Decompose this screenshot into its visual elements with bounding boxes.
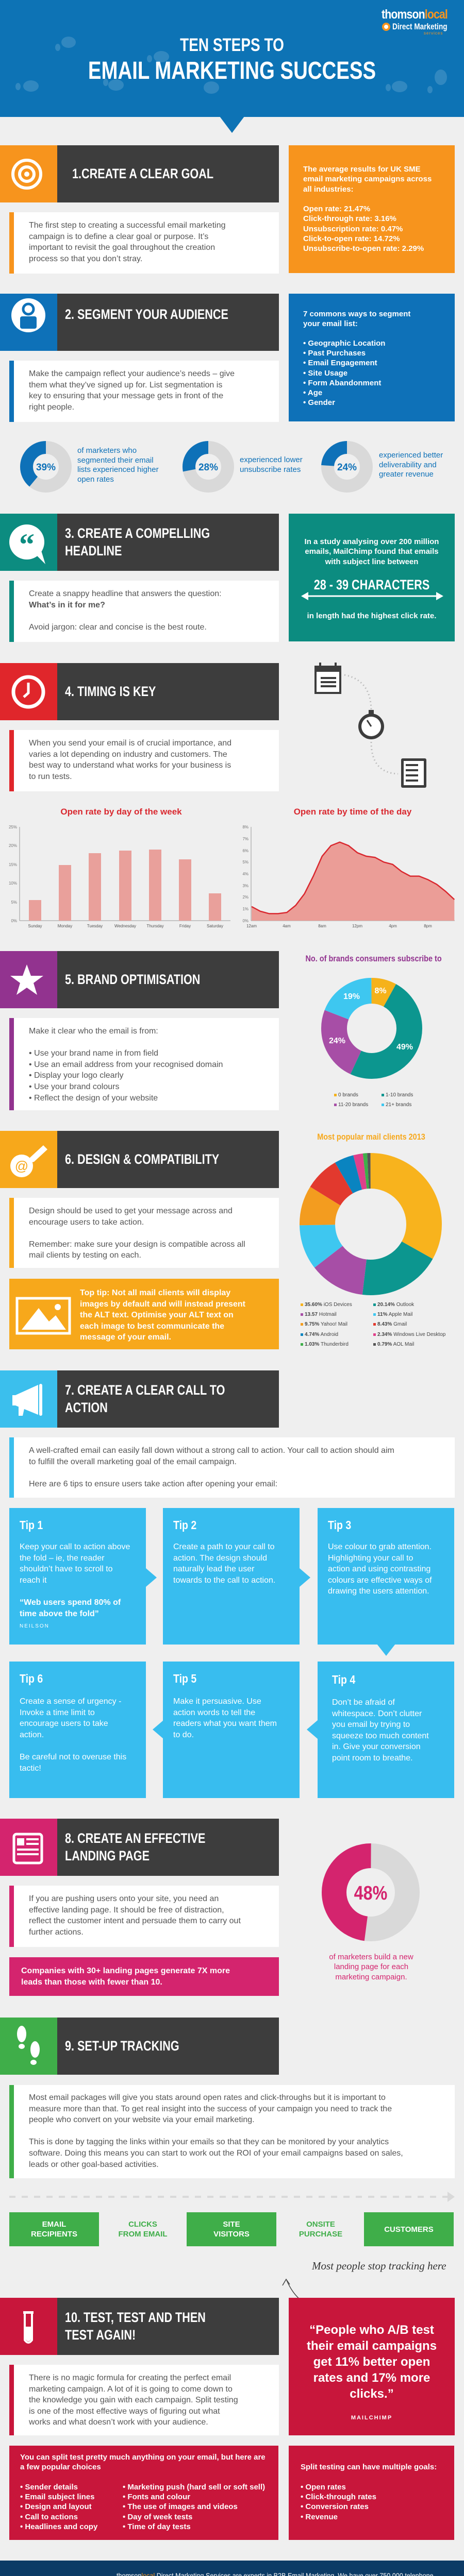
area chart: 7% [242,837,248,841]
section 3 text [9,581,279,642]
brands donut chart: No. of brands consumers subscribe to [305,954,442,963]
48% donut stat: 48% [354,1883,387,1904]
icon: test tube [0,2298,57,2355]
area chart: 6% [242,849,248,853]
area chart: 4% [242,872,248,876]
section 2 donut stats [20,441,443,493]
brands donut chart: 24% [329,1037,345,1045]
section 7 header [0,1370,279,1428]
section 8 header: 8. CREATE AN EFFECTIVE [65,1831,205,1846]
section 8 callout: Companies with 30+ landing pages generate 7X more [21,1967,230,1975]
area chart: 8am [318,924,326,928]
area chart: 4pm [389,924,397,928]
title: TEN STEPS TO [180,35,284,55]
section 1 stats box: Unsubscribe-to-open rate: 2.29% [303,244,424,253]
split test goals box: • Click-through rates [301,2493,376,2501]
section 3 stat box: with subject line between [325,557,418,566]
tip 1: Keep your call to action above [20,1543,130,1551]
tracking funnel boxes: FROM EMAIL [119,2230,167,2239]
section 2 donut stats: segmented their email [77,455,154,465]
split test goals box: Split testing can have multiple goals: [301,2463,437,2471]
top tip box: images by default and will instead present [80,1300,245,1309]
bar chart: 15% [9,862,17,867]
mail clients donut chart: 9.75% Yahoo! Mail [305,1321,347,1327]
section 3 text: What’s in it for me? [29,601,105,609]
section 1 stats box: Unsubscription rate: 0.47% [303,225,403,233]
bar chart: 20% [9,843,17,848]
brands donut chart: 21+ brands [386,1102,411,1108]
bar chart: Thursday [146,924,164,928]
tip 2 [163,1508,300,1645]
top tip box: each image to best communicate the [80,1322,224,1331]
arrow: tip4 to tip5 [307,1720,318,1739]
icon: target [0,145,57,202]
tip 4: you email by trying to [332,1720,410,1729]
section 8 header: LANDING PAGE [65,1848,150,1863]
bar chart: Tuesday [87,924,103,928]
section 9 text [9,2085,455,2178]
split test choices box: • The use of images and videos [123,2502,238,2511]
top tip box [9,1279,279,1349]
mail clients donut chart: Most popular mail clients 2013 [317,1132,425,1142]
tip 6: encourage users to take [20,1719,108,1728]
section 4 text: to run tests. [29,772,72,781]
section 1 text: campaign is to define a clear goal or purpose. It’s [29,232,208,241]
section 10 header: 10. TEST, TEST AND THEN [65,2310,206,2325]
logo: thomson local: services [424,31,443,36]
tip 6: Invoke a time limit to [20,1708,95,1717]
area chart: 12am [246,924,257,928]
section 9 text: measure more than that. To get real insight into the success of your campaign you need to track the [29,2105,392,2113]
tip 2: Create a path to your call to [173,1543,275,1551]
section 1 stats box: Click-through rate: 3.16% [303,214,396,223]
split test choices box: • Call to actions [20,2513,78,2521]
tip 4: Don’t be afraid of [332,1698,395,1707]
tracking funnel boxes [9,2212,454,2246]
section 2 list box: your email list: [303,319,358,328]
section 1 header [0,145,279,202]
section 2 donut stats: unsubscribe rates [240,465,301,474]
tip 5: to do. [173,1731,194,1739]
mail clients donut chart: 0.79% AOL Mail [377,1342,414,1347]
quote box: mailchimp [289,2298,455,2435]
split test goals box: • Open rates [301,2483,346,2492]
bar chart: Open rate by day of the week [60,807,182,817]
area chart [242,807,455,928]
section 3 stat box: emails, MailChimp found that emails [305,547,439,556]
tip 5: Tip 5 [173,1672,196,1685]
section 4 text: When you send your email is of crucial importance, and [29,739,231,748]
tip 4: point room to breathe. [332,1754,413,1762]
section 2 donut stats: deliverability and [379,461,437,469]
tip 5 [163,1662,300,1798]
tip 1 [9,1508,146,1645]
tip 4: whitespace. Don’t clutter [332,1709,422,1718]
bar chart: Sunday [28,924,42,928]
icon: at sign with pencil: @ [15,1158,28,1174]
section 1 header: 1.CREATE A CLEAR GOAL [72,166,213,181]
tip 5: action words to tell the [173,1708,255,1717]
section 2 text: Make the campaign reflect your audience’s needs – give [29,369,235,378]
section 6 text: Remember: make sure your design is compatible across all [29,1240,245,1249]
tip 1: NEILSON [20,1623,49,1629]
arrow: tip2 to tip3 [300,1568,310,1587]
section 2 list box: • Site Usage [303,369,347,378]
quote box: mailchimp: MAILCHIMP [351,2415,392,2421]
section 1 text: process so that you don’t stray. [29,255,142,263]
section 1 stats box [289,145,455,273]
48% donut stat [322,1843,420,1981]
tip 5: readers what you want them [173,1719,277,1728]
brands donut chart: 49% [396,1043,413,1052]
section 1 text [9,212,279,274]
section 4 header [0,663,279,720]
bar chart: 0% [11,919,17,923]
quote box: mailchimp: clicks.” [350,2387,394,2401]
tip 3: drawing the users attention. [328,1587,429,1596]
section 2 donut stats: experienced lower [240,455,303,464]
tip 1: the fold – ie, the reader [20,1554,105,1563]
split test choices box: • Fonts and colour [123,2493,190,2501]
split test goals box [289,2446,454,2540]
bar chart: 25% [9,825,17,829]
section 5 text: • Display your logo clearly [29,1071,123,1080]
bar chart: Wednesday [114,924,136,928]
section 1 text: important to revisit the goal throughout the creation [29,243,215,252]
section 3 stat box: in length had the highest click rate. [307,612,436,620]
tip 3: Highlighting your call to [328,1554,413,1563]
tip 3: action and using contrasting [328,1565,430,1573]
section 10 text: marketing campaign. A lot of it is going to come down to [29,2385,233,2394]
section 2 donut stats: 28% [198,462,218,473]
mail clients donut chart: 13.57 Hotmail [305,1312,337,1317]
tip 1: time above the fold” [20,1609,99,1618]
section 2 list box: • Gender [303,398,335,407]
section 1 text: The first step to creating a successful email marketing [29,221,226,230]
section 8 callout [9,1957,279,1996]
tip 3: Tip 3 [328,1518,351,1532]
section 2 donut stats: 39% [36,462,56,473]
section 2 donut stats: of marketers who [77,446,137,455]
arrow: dashed tracking flow [9,2192,455,2202]
split test goals box: • Revenue [301,2513,338,2521]
section 2 donut stats: lists experienced higher [77,465,159,474]
tracking funnel boxes: SITE [223,2220,240,2229]
tracking funnel boxes: PURCHASE [299,2230,342,2239]
mail clients donut chart: 4.74% Android [305,1332,338,1337]
section 4 text: best way to understand what works for your business is [29,761,231,770]
section 8 header [0,1819,279,1876]
icon: at sign with pencil [0,1131,57,1188]
area chart: 8% [242,825,248,829]
split test choices box: • Design and layout [20,2502,92,2511]
tracking funnel boxes: RECIPIENTS [31,2230,77,2239]
section 2 text: right people. [29,403,74,412]
brands donut chart: 19% [343,992,360,1001]
split test choices box: • Email subject lines [20,2493,94,2501]
section 1 stats box: The average results for UK SME [303,165,421,174]
header banner [0,0,464,133]
section 2 text: key to ensuring that your message gets in front of the [29,392,223,400]
section 2 text: them what they’ve signed up for. List segmentation is [29,381,222,389]
bar chart [9,807,230,928]
section 8 text [9,1886,279,1947]
quote box: mailchimp: their email campaigns [307,2339,437,2353]
icon: image [15,1297,71,1334]
section 10 text [9,2365,279,2435]
section 8 callout: leads than those with fewer than 10. [21,1978,162,1987]
icon: clock [0,663,57,720]
brands donut chart: 1-10 brands [386,1092,413,1098]
tip 2: naturally lead the user [173,1565,254,1573]
section 3 header [0,514,279,571]
section 3 stat box: In a study analysing over 200 million [305,537,439,546]
48% donut stat: marketing campaign. [335,1973,407,1981]
tracking funnel boxes: CUSTOMERS [384,2225,434,2234]
tip 2: action. The design should [173,1554,267,1563]
tip 1: shouldn’t have to scroll to [20,1565,113,1573]
icon: person [0,294,57,351]
area chart: 1% [242,907,248,911]
tip 2: Tip 2 [173,1518,196,1532]
tip 5: Make it persuasive. Use [173,1697,261,1706]
section 5 text [9,1018,279,1110]
section 7 text: to fulfill the overall marketing goal of the email campaign. [29,1458,237,1466]
brands donut chart: 0 brands [338,1092,358,1098]
section 2 list box: • Age [303,388,322,397]
split test choices box: • Marketing push (hard sell or soft sell) [123,2483,265,2492]
icon: speech bubble: “ [19,528,35,562]
section 7 header: ACTION [65,1400,108,1415]
mail clients donut chart: 20.14% Outlook [377,1302,414,1308]
area chart: 3% [242,884,248,888]
tip 3: Use colour to grab attention. [328,1543,432,1551]
section 2 list box: • Past Purchases [303,349,366,358]
section 6 text: mail clients by testing on each. [29,1251,141,1260]
section 5 text: • Reflect the design of your website [29,1094,158,1103]
arrow: double [301,592,443,600]
section 6 header: 6. DESIGN & COMPATIBILITY [65,1151,219,1167]
area chart: 0% [242,919,248,923]
tip 6: Create a sense of urgency - [20,1697,121,1706]
tip 2: towards to the call to action. [173,1576,275,1585]
section 10 text: works and what doesn’t work with your audience. [29,2418,208,2427]
section 1 stats box: all industries: [303,185,354,194]
arrow: curved pointer [282,2278,299,2298]
logo: thomson local [382,7,448,36]
top tip box: the ALT text. Optimise your ALT text on [80,1311,234,1319]
tip 6: action. [20,1731,44,1739]
bar chart: 5% [11,900,17,905]
section 8 text: effective landing page. It should be free of distraction, [29,1906,224,1914]
area chart: Open rate by time of the day [294,807,412,817]
section 9 text: software. Doing this means you can start to work out the ROI of your email campaigns based on sales, [29,2149,403,2158]
section 9 text: people who convert on your website via your email marketing. [29,2115,255,2124]
section 10 text: is one of the most effective ways of figuring out what [29,2407,220,2416]
tip 3: colours are effective ways of [328,1576,432,1585]
section 1 stats box: email marketing campaigns across [303,175,432,183]
tip 4 [318,1662,454,1798]
section 6 text: encourage users to take action. [29,1218,144,1227]
section 2 header: 2. SEGMENT YOUR AUDIENCE [65,307,228,322]
area chart: 12pm [352,924,362,928]
area chart: 8pm [424,924,432,928]
section 7 text [9,1437,455,1498]
top tip box: Top tip: Not all mail clients will display [80,1289,230,1297]
section 2 donut stats: open rates [77,475,114,483]
tip 4: squeeze too much content [332,1732,429,1740]
section 8 text: If you are pushing users onto your site, you need an [29,1894,219,1903]
title: EMAIL MARKETING SUCCESS [88,57,376,84]
area chart: 2% [242,895,248,900]
section 6 text: Design should be used to get your message across and [29,1207,233,1215]
mail clients donut chart: 11% Apple Mail [377,1312,412,1317]
tip 1: “Web users spend 80% of [20,1598,121,1607]
footer [0,2561,464,2576]
mail clients donut chart [300,1132,445,1347]
tip 6: Be careful not to overuse this [20,1753,126,1761]
tip 4: Tip 4 [332,1673,355,1686]
section 2 list box: • Email Engagement [303,359,377,367]
arrow: tip1 to tip2 [146,1568,157,1587]
mail clients donut chart: 1.03% Thunderbird [305,1342,349,1347]
section 5 text: Make it clear who the email is from: [29,1027,158,1036]
quote box: mailchimp: “People who A/B test [309,2323,434,2337]
section 5 header [0,951,279,1008]
section 2 list box: • Geographic Location [303,339,385,348]
tip 1: reach it [20,1576,46,1585]
section 8 text: reflect the customer intent and persuade them to carry out [29,1917,241,1925]
split test choices box: • Sender details [20,2483,78,2492]
section 4 header: 4. TIMING IS KEY [65,684,156,699]
bar chart: 10% [9,881,17,886]
section 2 donut stats: greater revenue [379,470,434,479]
section 2 list box [289,294,455,421]
section 1 stats box: Click-to-open rate: 14.72% [303,234,400,243]
split test choices box: You can split test pretty much anything on your email, but here are [20,2453,266,2462]
section 1 stats box: Open rate: 21.47% [303,205,370,213]
tip 1: Tip 1 [20,1518,43,1532]
tip 3 [318,1508,454,1645]
quote box: mailchimp: rates and 17% more [313,2371,430,2385]
section 7 text: A well-crafted email can easily fall down without a strong call to action. Your call to action should aim [29,1446,394,1455]
brands donut chart: 11-20 brands [338,1102,368,1108]
tip 4: in. Give your conversion [332,1742,421,1751]
area chart: 5% [242,860,248,865]
section 3 header: HEADLINE [65,543,122,558]
arrow: tip5 to tip6 [153,1720,163,1739]
section 2 text [9,361,279,422]
icon: footprints [0,2018,57,2075]
tracking funnel boxes: CLICKS [128,2220,157,2229]
top tip box: message of your email. [80,1333,171,1342]
mail clients donut chart: 35.60% iOS Devices [305,1302,352,1308]
section 2 donut stats: experienced better [379,451,443,460]
section 6 header [0,1131,279,1188]
section 9 text: leads or other goal-based activities. [29,2160,159,2169]
section 9 header [0,2018,279,2075]
split test choices box: • Time of day tests [123,2522,191,2531]
tracking funnel boxes: ONSITE [306,2220,335,2229]
section 4 icons: calendar, stopwatch, checklist [314,663,426,788]
icon: landing page document [0,1819,57,1876]
tip 6 [9,1662,146,1798]
icon: speech bubble [0,514,57,571]
section 3 text: Avoid jargon: clear and concise is the best route. [29,623,207,632]
callout: most people stop tracking here: Most people stop tracking here [312,2260,446,2272]
section 10 header [0,2298,279,2355]
logo: thomson local: Direct Marketing [392,22,448,31]
section 4 text: varies a lot depending on industry and customers. The [29,750,227,759]
area chart: 4am [283,924,291,928]
tracking funnel boxes: EMAIL [42,2220,66,2229]
bar chart: Saturday [207,924,223,928]
section 3 text: Create a snappy headline that answers the question: [29,589,222,598]
48% donut stat: landing page for each [334,1962,408,1971]
section 7 header: 7. CREATE A CLEAR CALL TO [65,1382,225,1398]
section 8 text: further actions. [29,1928,84,1937]
section 3 stat box [289,514,455,641]
split test choices box: • Headlines and copy [20,2522,97,2531]
section 5 header: 5. BRAND OPTIMISATION [65,972,200,987]
logo: thomson local: thomsonlocal [382,7,448,22]
tracking funnel boxes: VISITORS [213,2230,250,2239]
title [88,35,376,84]
brands donut chart [305,954,442,1108]
split test choices box [9,2446,278,2540]
tip 6: Tip 6 [20,1672,43,1685]
section 9 header: 9. SET-UP TRACKING [65,2038,179,2054]
section 7 text: Here are 6 tips to ensure users take action after opening your email: [29,1480,277,1488]
section 6 text [9,1198,279,1268]
section 2 list box: • Form Abandonment [303,379,381,387]
section 5 text: • Use an email address from your recognised domain [29,1060,223,1069]
bar chart: Monday [58,924,72,928]
charts: open rate by day and by time [9,807,455,928]
section 5 text: • Use your brand name in from field [29,1049,158,1058]
section 5 text: • Use your brand colours [29,1082,119,1091]
section 10 text: the knowledge you gain with each campaign. Split testing [29,2396,238,2404]
48% donut stat: of marketers build a new [329,1953,413,1961]
section 2 header [0,294,279,351]
tip 6: tactic! [20,1764,41,1773]
section 9 text: Most email packages will give you stats around open rates and click-throughs but it is important to [29,2093,386,2102]
section 9 text: This is done by tagging the links within your emails so that they can be monitored by your analytics [29,2138,389,2146]
bar chart: Friday [179,924,191,928]
section 4 text [9,730,279,791]
section 2 list box: 7 commons ways to segment [303,310,410,318]
icon: star [0,951,57,1008]
section 3 header: 3. CREATE A COMPELLING [65,526,210,541]
brands donut chart: 8% [374,987,387,995]
arrow: tip3 to tip4 [377,1644,395,1656]
split test goals box: • Conversion rates [301,2502,369,2511]
split test choices box: • Day of week tests [123,2513,192,2521]
icon: megaphone [0,1370,57,1428]
mail clients donut chart: 2.34% Windows Live Desktop [377,1332,445,1337]
quote box: mailchimp: get 11% better open [313,2355,430,2369]
section 2 donut stats: 24% [337,462,357,473]
section 3 stat box: 28 - 39 CHARACTERS [314,577,429,592]
split test choices box: a few popular choices [20,2463,101,2471]
section 10 text: There is no magic formula for creating the perfect email [29,2374,231,2382]
mail clients donut chart: 8.43% Gmail [377,1321,407,1327]
section 10 header: TEST AGAIN! [65,2327,136,2343]
